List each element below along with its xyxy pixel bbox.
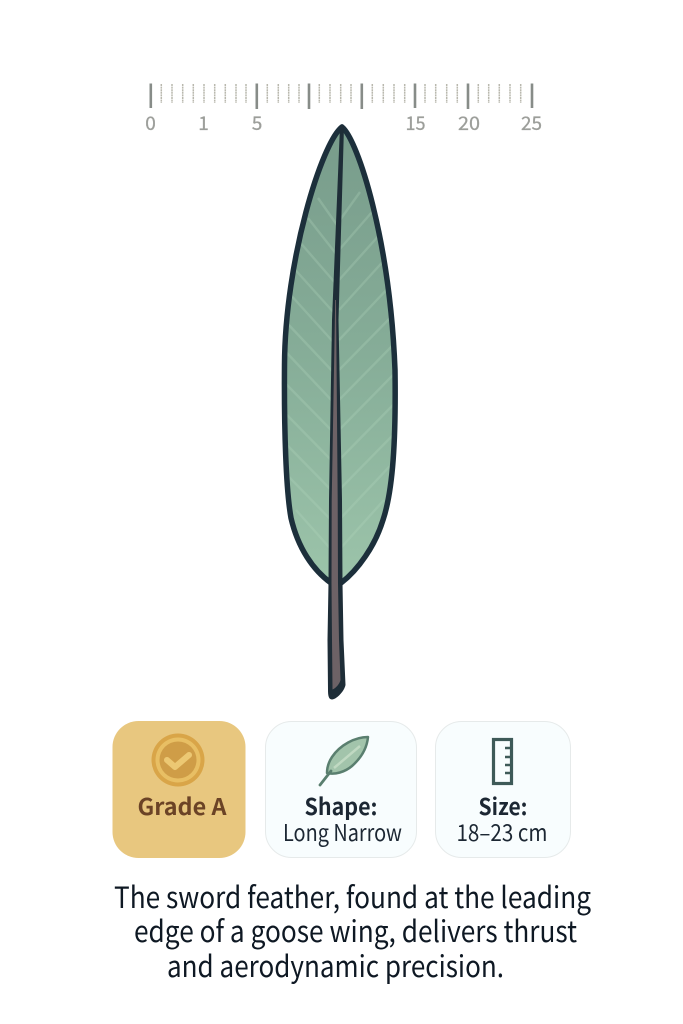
icon: check badge — [152, 734, 204, 786]
caption: and aerodynamic precision. — [167, 944, 504, 986]
ruler labels: 5 — [252, 109, 262, 136]
grade label: Grade A — [138, 788, 227, 822]
size label: Size: — [478, 788, 528, 822]
ruler labels: 20 — [458, 109, 480, 136]
feather vane — [284, 127, 395, 583]
card background — [436, 722, 570, 858]
ruler labels: 25 — [521, 109, 542, 136]
card background — [266, 722, 416, 858]
feather illustration — [284, 126, 396, 700]
ruler major ticks — [151, 84, 532, 109]
feather outline — [284, 127, 395, 583]
ruler labels: 15 — [406, 109, 426, 136]
caption — [114, 875, 591, 986]
shape label: Shape: — [304, 788, 378, 822]
caption: The sword feather, found at the leading — [114, 875, 591, 917]
card: shape — [266, 722, 416, 858]
shape value: Long Narrow — [283, 814, 402, 848]
caption: edge of a goose wing, delivers thrust — [134, 909, 577, 951]
card: size — [436, 722, 570, 858]
card: grade — [112, 721, 246, 858]
icon: ruler — [494, 740, 512, 784]
feather quill — [328, 126, 346, 700]
ruler — [145, 84, 542, 136]
card background — [112, 721, 246, 858]
ruler labels: 1 — [198, 109, 209, 136]
size value: 18–23 cm — [456, 814, 548, 848]
feather barbs — [288, 192, 392, 500]
icon: feather — [320, 737, 368, 785]
ruler labels: 0 — [145, 109, 156, 136]
ruler labels — [145, 109, 542, 136]
ruler minor ticks — [161, 84, 521, 103]
